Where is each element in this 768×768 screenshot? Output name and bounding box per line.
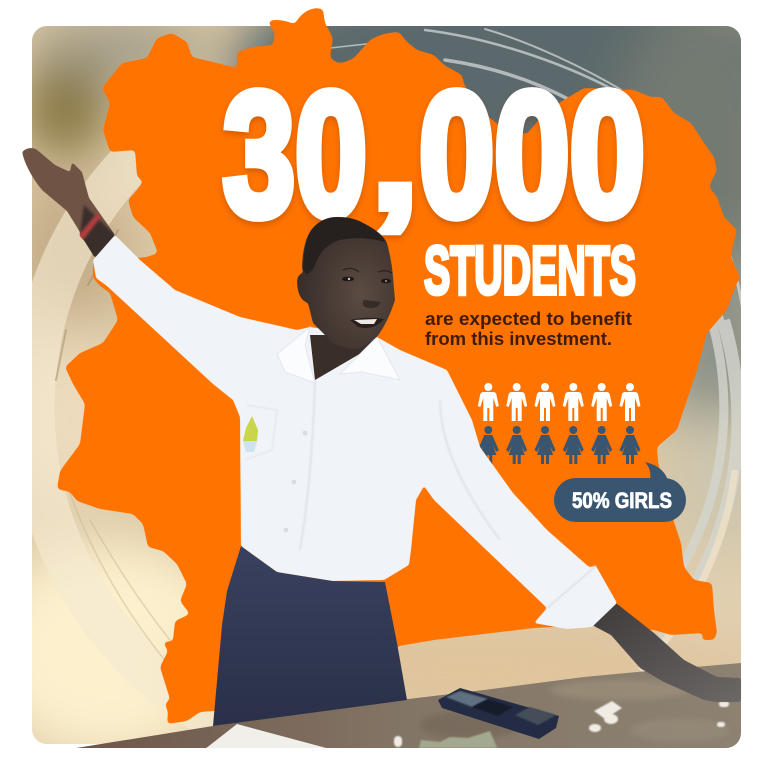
big number 30,000 (223, 57, 645, 253)
skirt (213, 546, 407, 726)
paper on table (205, 724, 330, 749)
collar (277, 327, 400, 383)
big number 30,000: 000 (419, 57, 645, 253)
pictogram: boys row (478, 383, 640, 421)
big number 30,000: , (371, 72, 419, 240)
brush ring: right (638, 255, 741, 672)
green cloth (419, 731, 497, 748)
callout: 50% girls (554, 462, 686, 522)
student figure (22, 148, 741, 726)
body text: are expected to benefit (425, 308, 632, 329)
brush ring: top right (330, 29, 625, 100)
pictogram: girls row (478, 426, 640, 464)
shirt buttons (284, 431, 307, 532)
big number 30,000: 30 (223, 57, 367, 253)
chalk pieces (394, 701, 729, 747)
white shirt (93, 235, 617, 629)
body text (425, 308, 632, 349)
calculator (438, 688, 559, 739)
body text: from this investment. (425, 328, 612, 349)
table mottling (422, 681, 688, 738)
head and face (297, 217, 395, 349)
callout: 50% girls: 50% GIRLS (572, 488, 672, 513)
table (70, 663, 741, 749)
raised hand and wrist (22, 148, 115, 258)
shirt badge (243, 416, 258, 452)
neck (310, 335, 378, 380)
right forearm and hand (592, 603, 741, 702)
brush ring: left (33, 165, 218, 720)
shirt shading (245, 380, 596, 608)
